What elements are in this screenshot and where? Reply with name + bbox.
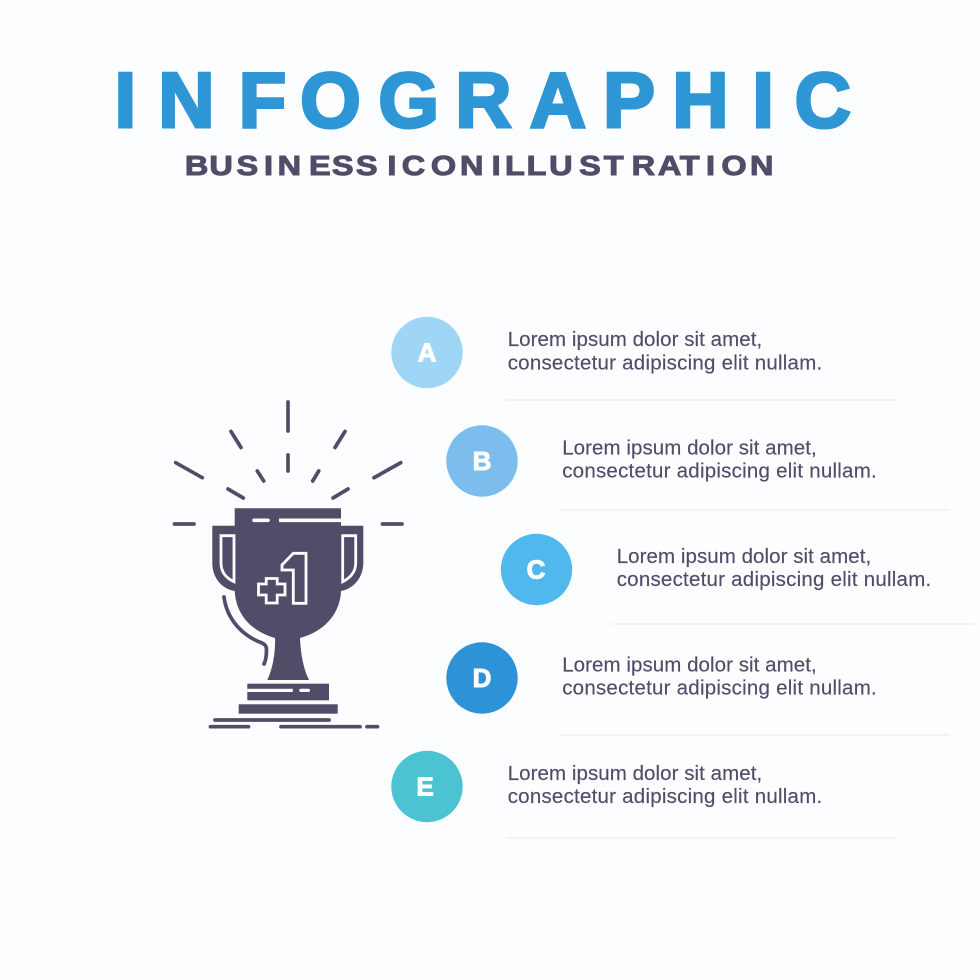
item A [391,317,896,400]
trophy cup [212,508,363,680]
text E [508,762,822,808]
badge D: D [473,663,491,693]
text A [508,328,822,374]
text A: consectetur adipiscing elit nullam. [508,352,822,374]
item D [446,642,950,735]
text A: Lorem ipsum dolor sit amet, [508,328,762,351]
text D: consectetur adipiscing elit nullam. [562,676,877,700]
icon rays [174,402,402,524]
text B [562,436,877,482]
text D [562,654,877,700]
badge C: C [527,554,546,584]
badge A: A [418,338,437,368]
text B: Lorem ipsum dolor sit amet, [562,436,817,460]
text C [617,545,931,591]
badge E: E [416,772,434,802]
cup side curve [224,597,266,664]
subtitle: BUSINESS ICON ILLUSTRATION [185,151,774,181]
badge A [391,317,463,388]
trophy base [239,684,338,714]
text C: Lorem ipsum dolor sit amet, [617,545,871,568]
badge C [501,534,572,605]
item E [391,751,896,838]
item C [501,534,973,624]
text C: consectetur adipiscing elit nullam. [617,568,931,591]
badge B [446,425,518,497]
title: INFOGRAPHIC [114,56,851,144]
badge B: B [473,446,491,476]
text E: Lorem ipsum dolor sit amet, [508,762,762,785]
ground lines [210,720,378,727]
text D: Lorem ipsum dolor sit amet, [562,654,817,676]
item B [446,425,950,510]
text E: consectetur adipiscing elit nullam. [508,785,822,808]
icon: trophy with +1 and rays [174,402,402,727]
text B: consectetur adipiscing elit nullam. [562,460,877,482]
plus one mark [258,553,306,603]
badge D [446,642,518,714]
badge E [391,751,463,822]
cup highlights [221,520,356,582]
